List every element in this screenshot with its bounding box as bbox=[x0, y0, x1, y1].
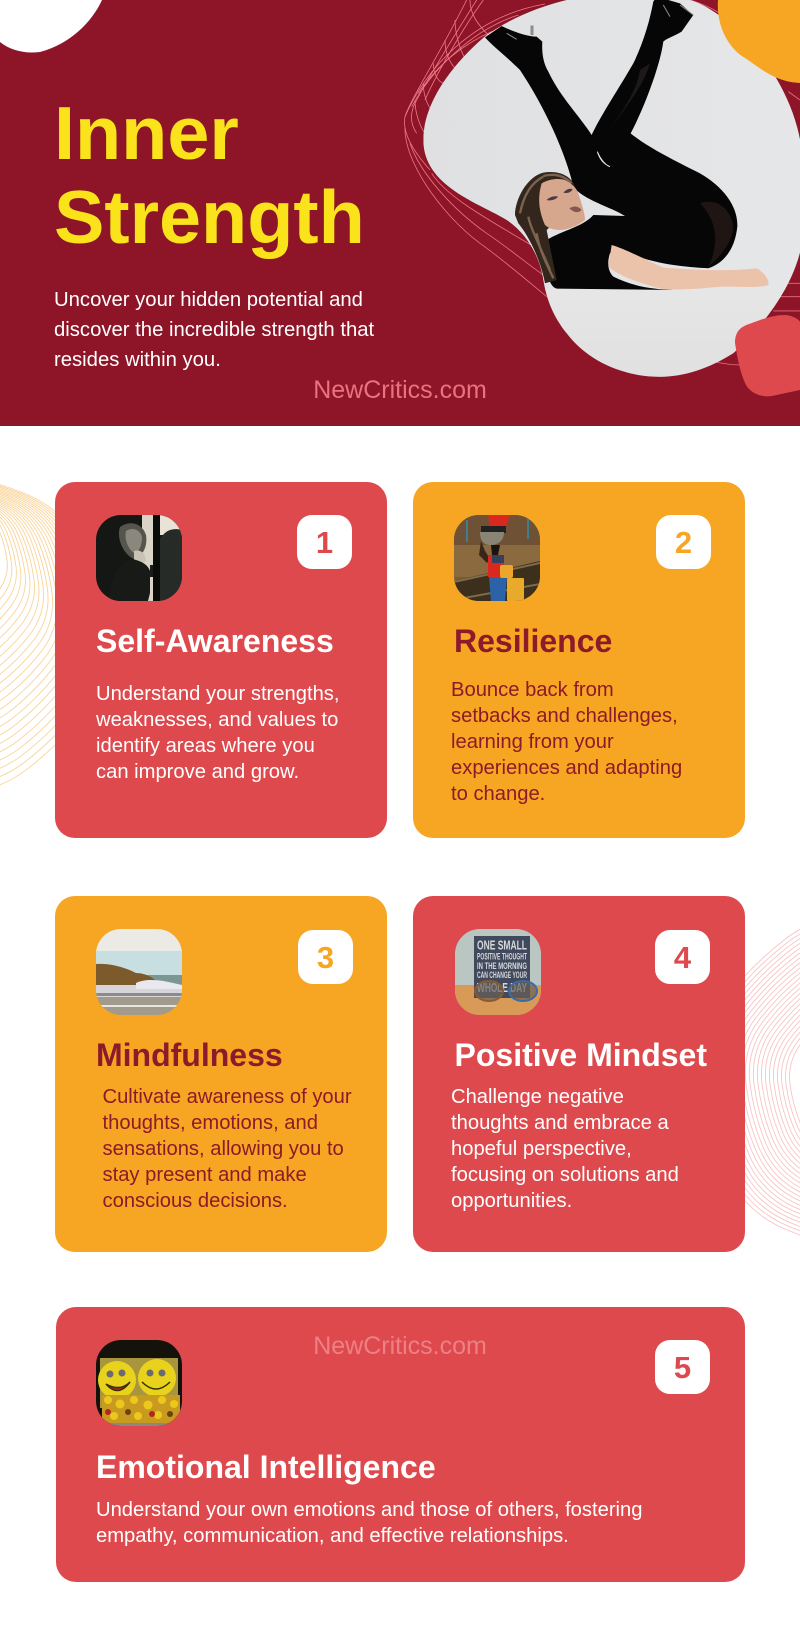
header artwork: blobs, wire lines and photo bbox=[0, 0, 800, 396]
red blob bottom-right bbox=[735, 315, 800, 396]
description bbox=[102, 1086, 352, 1212]
title bbox=[54, 92, 365, 260]
description: hopeful perspective, bbox=[451, 1138, 632, 1160]
icon: smiley cushions bbox=[96, 1340, 182, 1426]
heading: Emotional Intelligence bbox=[96, 1449, 436, 1485]
description: sensations, allowing you to bbox=[102, 1138, 344, 1160]
description: focusing on solutions and bbox=[451, 1164, 679, 1186]
icon: seashore bbox=[96, 929, 182, 1015]
description: Cultivate awareness of your bbox=[102, 1086, 352, 1108]
description: weaknesses, and values to bbox=[96, 709, 338, 731]
intro text: discover the incredible strength that bbox=[54, 319, 374, 341]
description: experiences and adapting bbox=[451, 757, 682, 779]
number badge 3: 3 bbox=[317, 940, 334, 975]
panel: self-awareness bbox=[55, 482, 387, 838]
icon: woman carrying water bbox=[454, 515, 540, 601]
intro text bbox=[54, 289, 374, 371]
description: Understand your strengths, bbox=[96, 682, 340, 704]
description: empathy, communication, and effective relationships. bbox=[96, 1525, 569, 1547]
heading: Mindfulness bbox=[96, 1037, 283, 1073]
number badge 3 bbox=[298, 930, 353, 984]
number badge 5: 5 bbox=[674, 1350, 691, 1385]
description bbox=[451, 1086, 679, 1212]
icon: sign with glasses bbox=[455, 929, 541, 1015]
intro text: resides within you. bbox=[54, 349, 221, 371]
header band bbox=[0, 0, 800, 426]
number badge 2: 2 bbox=[675, 525, 692, 560]
description bbox=[96, 1499, 643, 1547]
heading: Positive Mindset bbox=[454, 1037, 707, 1073]
description: opportunities. bbox=[451, 1190, 572, 1212]
white blob top-left bbox=[0, 0, 102, 53]
watermark on card: NewCritics.com bbox=[313, 1332, 487, 1360]
watermark top: NewCritics.com bbox=[313, 376, 487, 404]
description: Understand your own emotions and those of others, fostering bbox=[96, 1499, 643, 1521]
icon: woman portrait bbox=[96, 515, 182, 601]
panel: positive mindset bbox=[413, 896, 745, 1252]
description: learning from your bbox=[451, 731, 614, 753]
number badge 4 bbox=[655, 930, 710, 984]
title: Strength bbox=[54, 176, 365, 260]
description: Bounce back from bbox=[451, 679, 614, 701]
number badge 2 bbox=[656, 515, 711, 569]
heading: Resilience bbox=[454, 623, 612, 659]
description: identify areas where you bbox=[96, 735, 315, 757]
description: setbacks and challenges, bbox=[451, 705, 678, 727]
description: thoughts and embrace a bbox=[451, 1112, 669, 1134]
description bbox=[96, 682, 340, 783]
photo: woman posing on the floor bbox=[413, 0, 800, 382]
description bbox=[451, 679, 682, 805]
number badge 4: 4 bbox=[674, 940, 691, 975]
description: thoughts, emotions, and bbox=[102, 1112, 318, 1134]
wire lines around photo bbox=[405, 0, 800, 365]
number badge 1: 1 bbox=[316, 525, 333, 560]
heading: Self-Awareness bbox=[96, 623, 334, 659]
description: conscious decisions. bbox=[102, 1190, 288, 1212]
description: Challenge negative bbox=[451, 1086, 624, 1108]
orange blob top-right bbox=[718, 0, 800, 83]
wire lattice top-left of photo bbox=[404, 0, 545, 170]
panel: emotional intelligence bbox=[56, 1307, 745, 1582]
panel: mindfulness bbox=[55, 896, 387, 1252]
description: stay present and make bbox=[102, 1164, 307, 1186]
title: Inner bbox=[54, 92, 239, 176]
panel: resilience bbox=[413, 482, 745, 838]
description: to change. bbox=[451, 783, 545, 805]
number badge 1 bbox=[297, 515, 352, 569]
description: can improve and grow. bbox=[96, 761, 299, 783]
intro text: Uncover your hidden potential and bbox=[54, 289, 363, 311]
number badge 5 bbox=[655, 1340, 710, 1394]
